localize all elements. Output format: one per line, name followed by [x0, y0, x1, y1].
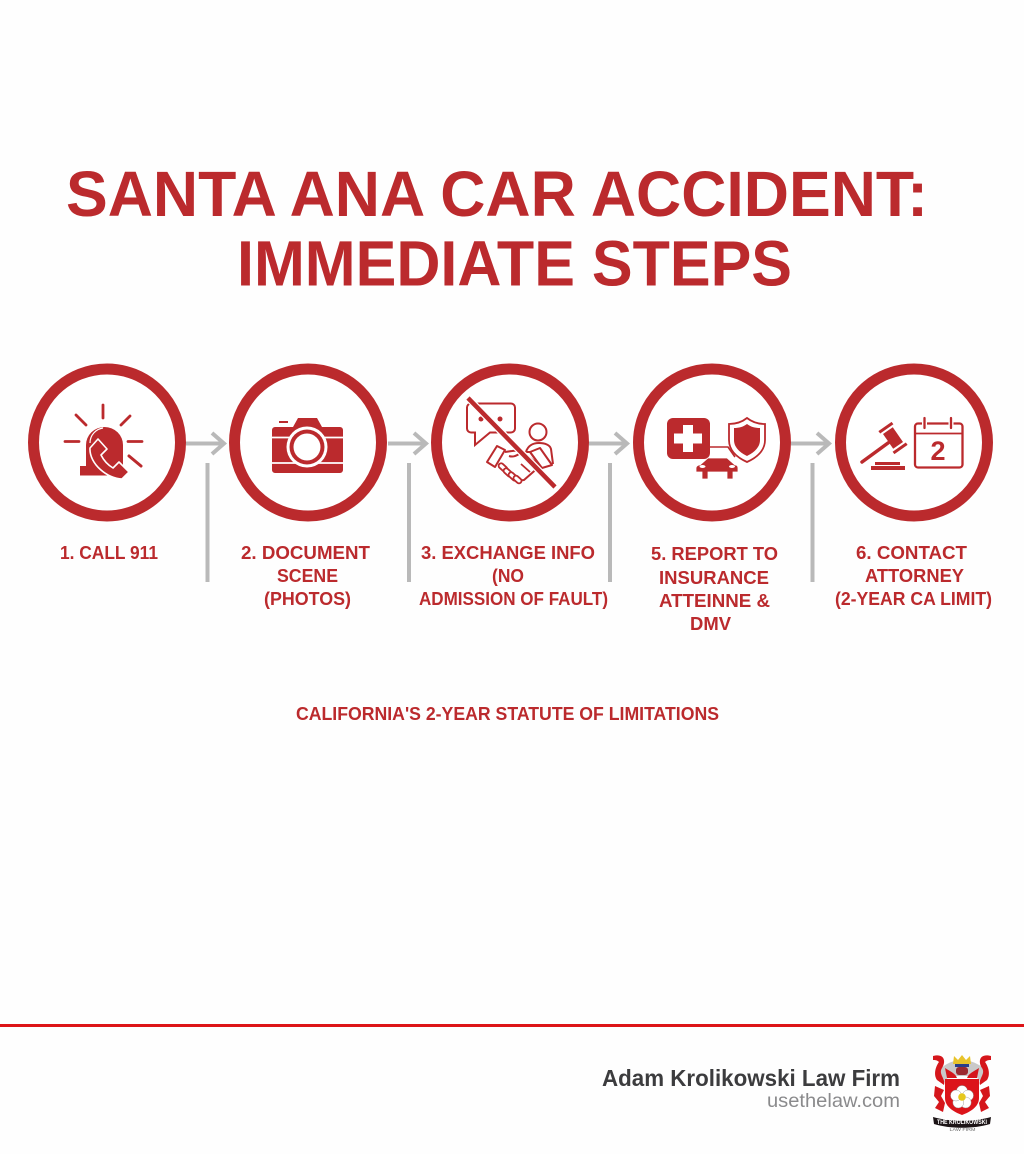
title: SANTA ANA CAR ACCIDENT:: [66, 158, 928, 230]
label: [651, 544, 778, 634]
label: INSURANCE: [659, 568, 769, 588]
title: IMMEDIATE STEPS: [237, 228, 792, 300]
label: [835, 543, 992, 609]
step 1: call 911: [34, 369, 180, 563]
footer firm name: usethelaw.com: [767, 1090, 900, 1112]
label: [419, 543, 608, 609]
logo: Krolikowski crest: THE KROLIKOWSKI: [937, 1119, 987, 1126]
footer firm name: [602, 1065, 900, 1112]
title: [66, 158, 928, 300]
label: 6. CONTACT: [856, 543, 967, 563]
statute of limitations note: CALIFORNIA'S 2-YEAR STATUTE OF LIMITATIONS: [296, 704, 719, 724]
logo: Krolikowski crest: LAW FIRM: [950, 1127, 976, 1132]
label: ATTORNEY: [865, 566, 964, 586]
label: ATTEINNE &: [659, 591, 770, 611]
icon: camera: [272, 418, 343, 473]
flow arrows and dividers: [186, 433, 829, 582]
icon: siren with phone: [65, 405, 142, 479]
icon: calendar: [915, 418, 962, 468]
logo: Krolikowski crest: [933, 1055, 991, 1132]
step 6: contact attorney: [835, 369, 992, 609]
label: ADMISSION OF FAULT): [419, 589, 608, 609]
icon: no admission of fault: [467, 398, 555, 487]
rose on shield: [950, 1085, 974, 1108]
icon: medical, car and shield: [667, 418, 765, 479]
step 5: report to insurance: [638, 369, 786, 634]
step 3: exchange info: [419, 369, 608, 609]
label: 2. DOCUMENT: [241, 543, 370, 563]
label: (NO: [492, 566, 524, 586]
label: (2-YEAR CA LIMIT): [835, 589, 992, 609]
label: 3. EXCHANGE INFO: [421, 543, 595, 563]
label: 5. REPORT TO: [651, 544, 778, 564]
footer rule: [0, 1024, 1024, 1027]
icon: calendar: 2: [930, 436, 946, 466]
label: 1. CALL 911: [60, 543, 158, 563]
icon: gavel: [862, 422, 908, 470]
footer firm name: Adam Krolikowski Law Firm: [602, 1065, 900, 1091]
label: DMV: [690, 614, 731, 634]
label: [241, 543, 370, 609]
label: SCENE: [277, 566, 338, 586]
step 2: document scene: [234, 369, 382, 609]
label: (PHOTOS): [264, 589, 351, 609]
